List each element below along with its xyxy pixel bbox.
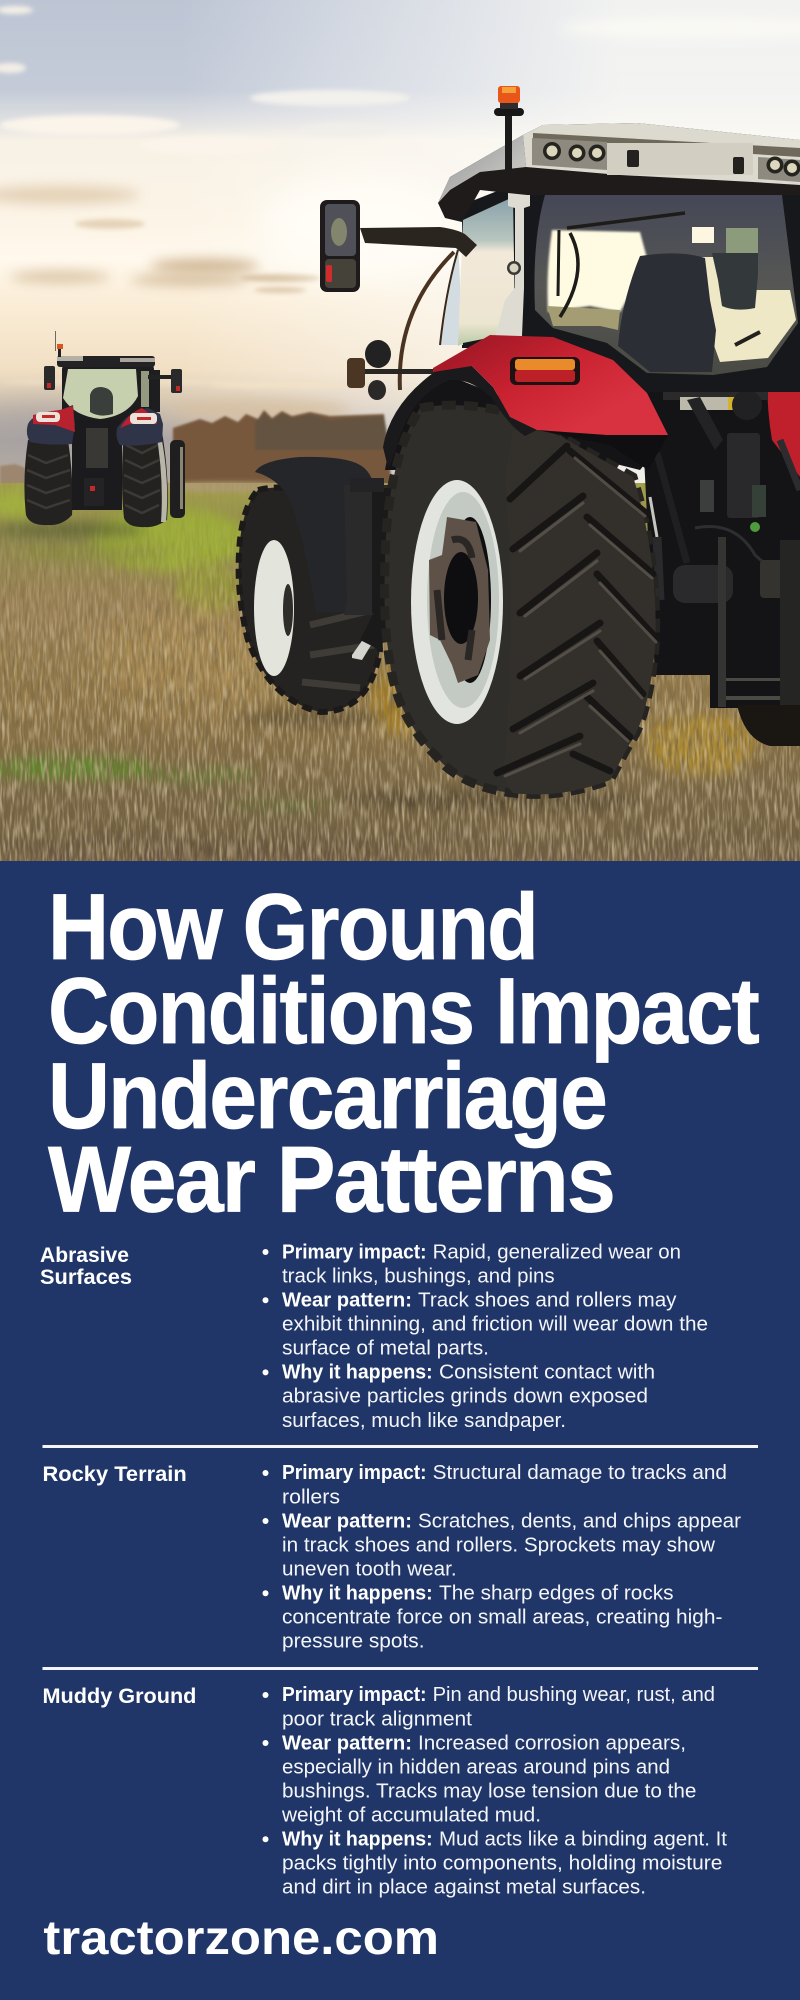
bullet list: abrasive surfaces: Why it happens:	[282, 1362, 433, 1384]
front tyre	[239, 488, 380, 712]
bullet list: muddy ground: Increased corrosion appears,	[418, 1732, 686, 1754]
bullet list: rocky terrain: The sharp edges of rocks	[439, 1582, 674, 1604]
seat silhouette	[618, 253, 716, 372]
bullet list: rocky terrain: uneven tooth wear.	[282, 1558, 457, 1580]
rear marker arm	[347, 340, 436, 400]
under-fender shadow	[537, 430, 668, 470]
bullet list: abrasive surfaces: Consistent contact with	[439, 1362, 655, 1384]
small tractor cab	[57, 356, 160, 424]
bullet list: rocky terrain: in track shoes and rollers. Sprockets may show	[282, 1534, 716, 1556]
bullet list: muddy ground	[262, 1684, 727, 1899]
hose	[400, 252, 454, 390]
bullet list: rocky terrain: Wear pattern:	[282, 1510, 412, 1532]
wiper	[567, 213, 685, 228]
section: rocky terrain	[42, 1462, 741, 1652]
rear right body	[644, 392, 800, 746]
bullet list: abrasive surfaces: Rapid, generalized wear on	[433, 1241, 681, 1263]
side window	[440, 197, 515, 346]
title: Wear Patterns	[48, 1126, 614, 1232]
red side panel	[768, 392, 800, 477]
title	[48, 874, 760, 1232]
tread mud highlights	[505, 458, 656, 776]
bullet list: rocky terrain: pressure spots.	[282, 1630, 424, 1652]
wheel arch shadow	[385, 380, 643, 470]
cab frame	[462, 178, 800, 392]
small tractor fenders	[27, 405, 163, 446]
small tractor tyres	[24, 430, 168, 527]
grab hose	[560, 233, 578, 317]
interior mirror	[712, 253, 758, 310]
big rear tyre	[385, 405, 657, 794]
bullet list: muddy ground: and dirt in place against metal surfaces.	[282, 1877, 646, 1899]
section: muddy ground	[42, 1684, 727, 1899]
foreground tractor	[239, 86, 800, 794]
black fender trim	[383, 365, 537, 468]
sky with clouds	[0, 0, 800, 500]
beacon lamp	[494, 86, 524, 170]
tread grooves	[497, 446, 657, 773]
heading: rocky terrain: Rocky Terrain	[42, 1462, 187, 1486]
red fender	[433, 335, 668, 435]
bullet list: rocky terrain: Primary impact:	[282, 1462, 426, 1484]
tail light	[510, 357, 580, 385]
hero photo: tractors in a field at sunset	[0, 0, 800, 862]
bullet list: muddy ground: weight of accumulated mud.	[281, 1804, 541, 1826]
roof	[438, 123, 800, 222]
bullet list: muddy ground: bushings. Tracks may lose tension due to the	[282, 1780, 696, 1802]
bullet list: abrasive surfaces: track links, bushings, and pins	[282, 1266, 555, 1288]
bullet list: muddy ground: Primary impact:	[282, 1684, 426, 1706]
bullet list: abrasive surfaces: exhibit thinning, and friction will wear down the	[282, 1314, 708, 1336]
bullet list: rocky terrain: Scratches, dents, and chips appear	[418, 1510, 741, 1532]
distant tractor	[24, 331, 185, 527]
bullet list: muddy ground: Pin and bushing wear, rust, and	[433, 1684, 715, 1706]
treeline	[0, 410, 392, 490]
dark fender of front wheel	[255, 457, 374, 613]
cab pillar	[495, 186, 530, 337]
bullet list: rocky terrain: concentrate force on small areas, creating high-	[282, 1606, 722, 1628]
heading: abrasive surfaces: Abrasive	[40, 1243, 129, 1267]
bullet list: abrasive surfaces: Wear pattern:	[282, 1290, 412, 1312]
bullet list: muddy ground: Wear pattern:	[282, 1732, 412, 1754]
mirror arm	[360, 227, 477, 257]
heading: abrasive surfaces: Surfaces	[40, 1265, 132, 1289]
bullet list: abrasive surfaces: abrasive particles grinds down exposed	[282, 1386, 648, 1408]
small tractor mirrors	[44, 331, 182, 393]
white rim	[411, 480, 503, 724]
bullet list: muddy ground: packs tightly into components, holding moisture	[282, 1852, 722, 1874]
rear window	[534, 195, 798, 375]
bullet list: rocky terrain	[262, 1462, 741, 1652]
chassis block	[344, 478, 394, 660]
bullet list: abrasive surfaces: Track shoes and rollers may	[418, 1290, 676, 1312]
bullet list: rocky terrain: Why it happens:	[282, 1582, 433, 1604]
far tyre	[170, 440, 185, 518]
bullet list: abrasive surfaces: Primary impact:	[282, 1241, 426, 1263]
bullet list: muddy ground: Mud acts like a binding agent. It	[439, 1828, 727, 1850]
bullet list: rocky terrain: rollers	[282, 1486, 340, 1508]
ladder frame	[718, 537, 726, 707]
title: Undercarriage	[48, 1043, 606, 1148]
wheel hub	[429, 517, 490, 683]
website footer: tractorzone.com	[43, 1912, 439, 1965]
mirror	[320, 200, 360, 292]
bullet list: rocky terrain: Structural damage to tracks and	[433, 1462, 727, 1484]
field ground	[0, 482, 800, 862]
bullet list: muddy ground: especially in hidden areas around pins and	[282, 1756, 670, 1778]
grey band under cab	[663, 392, 768, 400]
section: abrasive surfaces	[40, 1241, 708, 1432]
title: How Ground	[48, 874, 537, 979]
bullet list: muddy ground: poor track alignment	[282, 1708, 472, 1730]
glare through window	[548, 230, 648, 312]
small tractor chassis	[72, 420, 122, 510]
bullet list: abrasive surfaces: surface of metal parts.	[282, 1338, 489, 1360]
bullet list: abrasive surfaces	[262, 1241, 708, 1432]
bullet list: muddy ground: Why it happens:	[282, 1828, 433, 1850]
black arm	[687, 397, 723, 450]
heading: muddy ground: Muddy Ground	[42, 1684, 196, 1708]
bullet list: abrasive surfaces: surfaces, much like sandpaper.	[282, 1410, 566, 1432]
heading: abrasive surfaces	[40, 1243, 132, 1289]
